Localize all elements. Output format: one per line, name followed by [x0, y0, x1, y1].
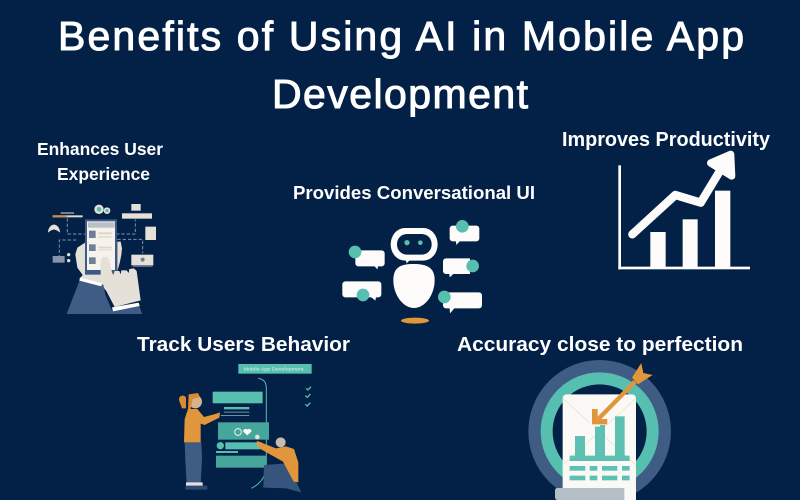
robot shadow — [401, 318, 429, 324]
icon: people building app interface: Mobile App Development — [244, 367, 304, 373]
icon: hand holding phone — [48, 204, 156, 314]
mobile app development banner — [238, 364, 312, 374]
heading: enhances user experience: Enhances User — [37, 139, 163, 159]
heading: accuracy close to perfection: Accuracy close to perfection — [457, 334, 743, 356]
report base — [555, 488, 624, 500]
heading: provides conversational UI: Provides Conversational UI — [293, 183, 535, 203]
title: Development — [272, 71, 529, 117]
title — [58, 13, 744, 117]
right hand pointing — [101, 257, 141, 307]
robot body — [393, 264, 435, 308]
robot head — [391, 228, 438, 263]
icon: people building app interface — [179, 364, 312, 492]
heading: track users behavior: Track Users Behavior — [137, 334, 350, 356]
standing person — [179, 393, 220, 490]
speech bubbles — [342, 226, 482, 313]
kneeling person — [255, 435, 301, 492]
arrow — [590, 407, 600, 427]
heading: improves productivity: Improves Productivity — [562, 129, 771, 151]
left hand behind phone — [75, 242, 113, 285]
icon: chatbot with speech bubbles — [342, 220, 482, 324]
icon: target with arrow on report — [535, 363, 665, 500]
title: Benefits of Using AI in Mobile App — [58, 13, 744, 59]
icon: rising bar chart with arrow — [618, 154, 750, 269]
heading: enhances user experience: Experience — [57, 164, 150, 184]
heading: enhances user experience — [37, 139, 163, 184]
